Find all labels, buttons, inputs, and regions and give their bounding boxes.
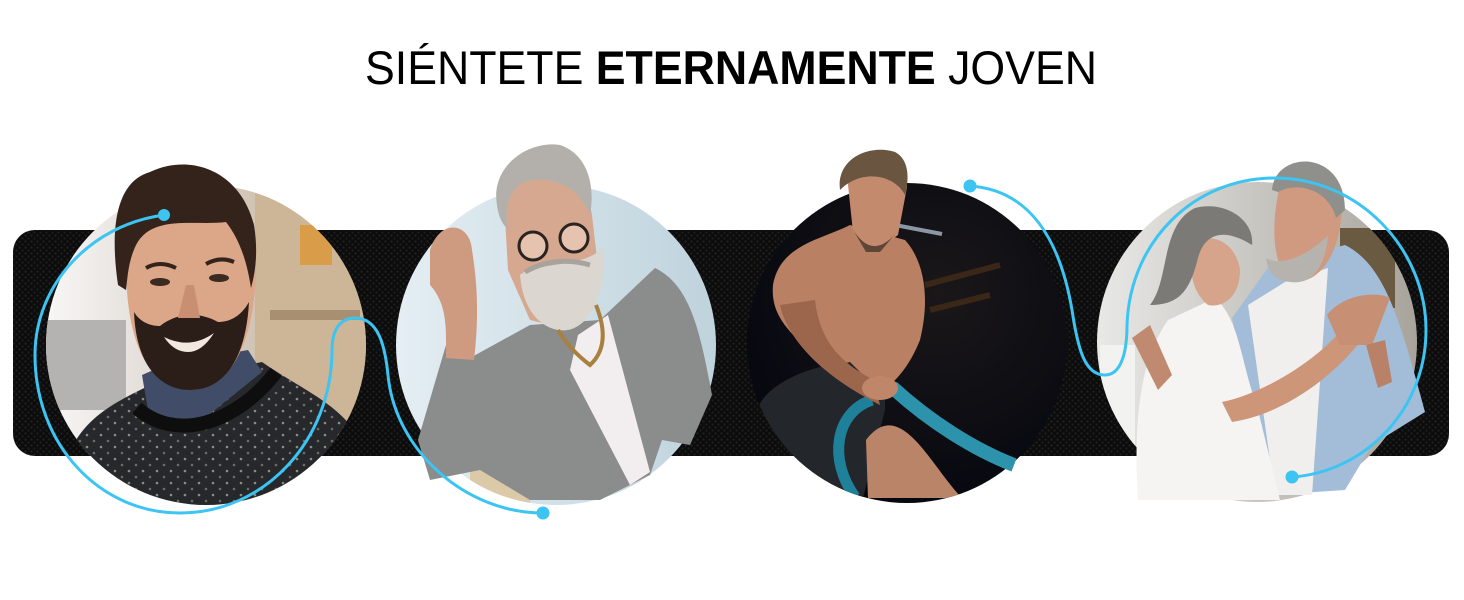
- dark textured band: [13, 230, 1449, 456]
- infographic canvas: [13, 43, 1449, 520]
- left flowing blue line with dots: [35, 209, 550, 520]
- right flowing blue line with dots: [964, 178, 1426, 484]
- face: [126, 205, 256, 390]
- photo: athlete with battle rope: [747, 150, 1067, 510]
- photo: senior man in grey blazer: [396, 144, 716, 510]
- photo: senior couple dancing: [1097, 161, 1425, 502]
- photo: young bearded man: [46, 165, 370, 505]
- title: SIÉNTETE ETERNAMENTE JOVEN: [365, 41, 1097, 94]
